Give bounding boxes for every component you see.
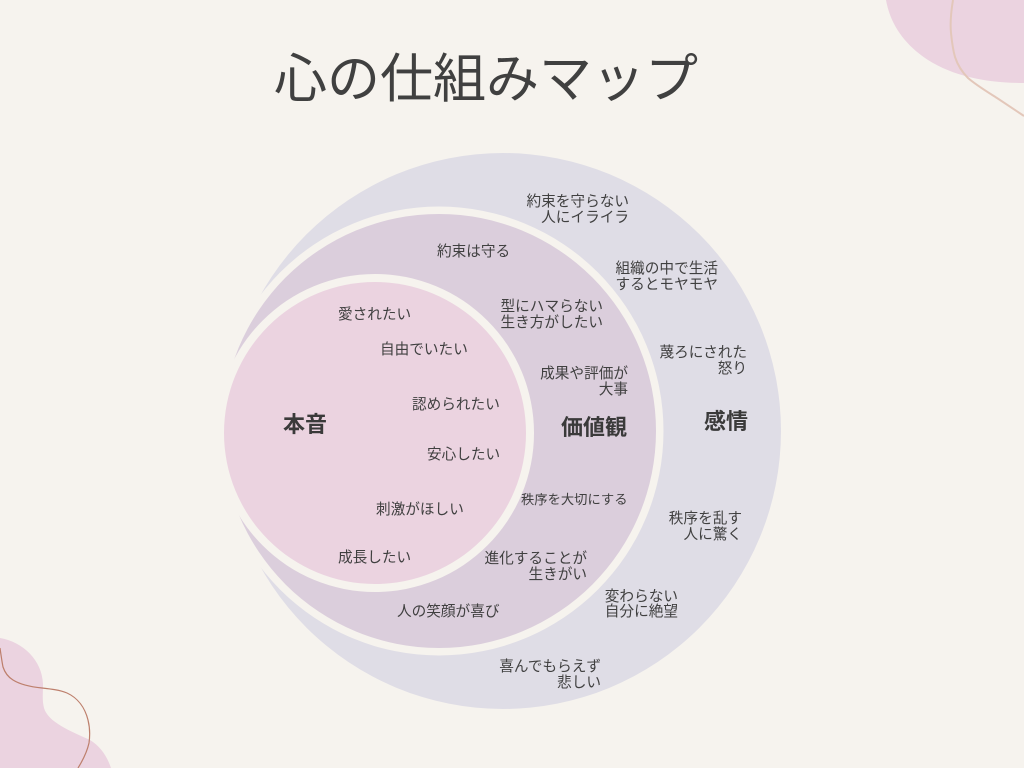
labels: 本音: 愛されたい xyxy=(338,306,411,323)
labels: 価値観: 人の笑顔が喜び xyxy=(397,603,500,620)
labels: 感情: 人に驚く xyxy=(683,526,742,543)
labels: 感情: 自分に絶望 xyxy=(605,603,678,620)
labels: 価値観: 型にハマらない xyxy=(501,298,603,315)
labels: 感情: 悲しい xyxy=(557,674,601,691)
labels: 価値観 xyxy=(397,243,628,620)
labels: 本音: 成長したい xyxy=(338,549,411,566)
labels: 感情: 怒り xyxy=(718,360,747,377)
labels: 感情: 蔑ろにされた xyxy=(659,344,747,361)
labels: 感情: 約束を守らない xyxy=(527,193,629,210)
labels: 価値観: 進化することが xyxy=(485,550,587,567)
circle: 価値観 middle xyxy=(222,214,656,648)
labels: 感情: 喜んでもらえず xyxy=(499,658,601,675)
labels: 価値観: 秩序を大切にする xyxy=(521,492,628,507)
circle: 本音 inner xyxy=(224,282,526,584)
decoration: top right blob xyxy=(886,0,1024,116)
labels: 本音: 認められたい xyxy=(412,396,500,413)
labels: 感情: 秩序を乱す xyxy=(669,510,742,527)
labels: 本音: 刺激がほしい xyxy=(376,501,464,518)
labels: 本音: 自由でいたい xyxy=(380,341,468,358)
circle: 感情 outer xyxy=(225,153,781,709)
diagram: nested circles xyxy=(214,153,781,709)
labels: 感情: 人にイライラ xyxy=(541,210,629,226)
labels: 本音 xyxy=(338,306,500,566)
ring: gap around 価値観 xyxy=(214,206,664,656)
labels: 本音: 安心したい xyxy=(427,446,500,463)
labels: 価値観: 生き方がしたい xyxy=(501,314,603,331)
labels: 感情: 変わらない xyxy=(605,588,678,605)
labels: 価値観: 生きがい xyxy=(528,566,587,583)
title: 心の仕組みマップ xyxy=(274,50,698,109)
heading: 価値観: 価値観 xyxy=(561,415,627,440)
labels: 感情 xyxy=(499,193,747,691)
ring: gap around 本音 xyxy=(216,274,534,592)
labels: 価値観: 大事 xyxy=(599,381,628,398)
labels: 価値観: 成果や評価が xyxy=(540,365,628,382)
labels: 感情: 組織の中で生活 xyxy=(616,260,718,277)
labels: 感情: するとモヤモヤ xyxy=(616,276,718,293)
heading: 本音: 本音 xyxy=(283,412,327,437)
decoration: bottom left blob xyxy=(0,638,111,768)
labels: 価値観: 約束は守る xyxy=(437,243,510,260)
heading: 感情: 感情 xyxy=(704,409,748,434)
